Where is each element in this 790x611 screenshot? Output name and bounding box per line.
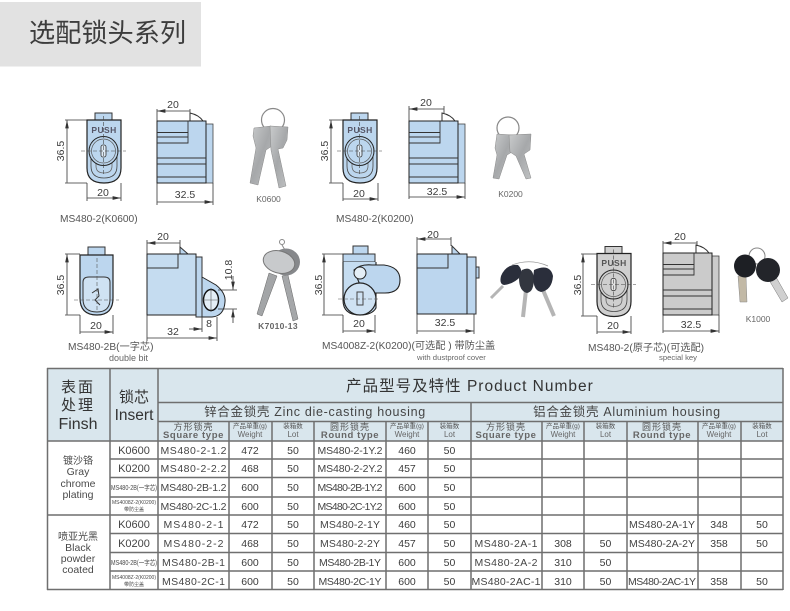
aluminium housing values: 50 [600,557,611,569]
sub-column headings: Round type [633,430,691,441]
product drawing: MS480-2(K0600): MS480-2(K0600) [60,214,138,225]
product drawing: MS480-2(K0200): 20 [353,188,365,200]
finish column heading: Finsh [58,416,98,433]
zinc housing values: 50 [287,482,299,494]
zinc housing values: MS480-2-1Y.2 [318,445,383,457]
zinc housing values: MS480-2B-1 [162,557,225,569]
sub-column headings: Weight [395,430,420,439]
zinc housing values: MS480-2-2Y.2 [318,463,383,475]
sub-column headings: 产品单重(g) [390,421,424,430]
product drawing: MS4008Z-2 with dustproof cover [313,229,554,362]
table header background [47,368,783,441]
insert column values: MS480-2B(一字芯) [111,483,157,492]
product drawing: MS480-2(K0600): K0600 [256,194,281,204]
zinc housing values: 50 [444,482,455,494]
aluminium housing values: 310 [554,576,572,588]
aluminium housing values: 50 [600,576,611,588]
icon: black keys K1000 [734,248,788,302]
sub-column headings: 方形锁壳 [173,421,214,432]
zinc housing values: MS480-2C-1 [162,576,225,588]
sub-column headings: Round type [321,430,379,441]
sub-column headings: 产品单重(g) [233,421,267,430]
icon: keys K7010-13 [257,240,300,321]
sub-column headings: 产品单重(g) [546,421,580,430]
zinc housing values: MS480-2B-1Y.2 [318,482,383,494]
side view with ear [147,231,237,341]
finish: black powder coated: Black [65,542,92,554]
aluminium housing values: 50 [600,538,611,550]
zinc housing values: 50 [444,501,455,513]
aluminium housing values: 348 [710,519,728,531]
zinc housing values: MS480-2-2 [164,538,224,550]
title: 选配锁头系列 [29,18,186,48]
zinc housing values [160,445,455,588]
product drawing: MS480-2(K0200) [319,97,531,225]
sub-column headings: 装箱数 [440,421,460,430]
icon: dark keys [491,262,554,317]
finish: gray chrome plating: chrome [60,478,96,490]
insert column values: K0600 [118,519,150,531]
aluminium housing values: 358 [710,538,728,550]
aluminium housing values: MS480-2A-2Y [629,538,695,550]
product drawing: MS480-2(K0600): 36.5 [55,141,67,161]
finish: black powder coated [58,530,98,576]
zinc housing values: 50 [287,519,299,531]
zinc housing values: 600 [398,557,416,569]
sub-column headings: 装箱数 [283,421,303,430]
dust cover [354,265,400,293]
zinc housing values: 472 [241,445,259,457]
product drawing: MS4008Z-2 with dustproof cover: MS4008Z-2(K0200)(可选配 ) 带防尘盖 [322,339,495,352]
zinc housing values: 600 [241,576,259,588]
housing headings [204,404,721,419]
icon: keys K0200 [493,117,531,179]
side view: 32.5 [427,186,447,198]
product drawing: MS480-2(K0200): MS480-2(K0200) [336,214,414,225]
finish column heading [58,379,98,433]
product drawing: MS480-2B double bit: 20 [90,320,102,332]
sub-column headings: Lot [600,430,612,439]
side view [409,97,465,199]
zinc housing values: 468 [241,463,259,475]
finish column heading: 处理 [61,397,95,414]
zinc housing values: MS480-2C-1Y.2 [318,501,383,513]
zinc housing values: 50 [287,463,299,475]
zinc housing values: 600 [241,557,259,569]
finish column heading: 表面 [61,379,95,396]
aluminium housing values: MS480-2A-2 [474,557,538,569]
zinc housing values: MS480-2B-1Y [319,557,381,569]
zinc housing values: 50 [444,576,455,588]
aluminium housing values: 50 [756,519,768,531]
product drawing: MS480-2B double bit: double bit [109,353,149,363]
zinc housing values: 600 [241,501,259,513]
sub-column headings: Lot [444,430,456,439]
insert column values: K0200 [118,463,150,475]
side view: 20 [674,231,686,243]
zinc housing values: 457 [398,538,416,550]
product drawing: MS4008Z-2 with dustproof cover: 20 [353,318,365,330]
zinc housing values: 460 [398,445,416,457]
housing headings: 锌合金锁壳 Zinc die-casting housing [204,404,426,419]
zinc housing values: 50 [444,463,455,475]
insert column values: MS4008Z-2(K0200) [112,500,156,506]
finish: gray chrome plating: 镀沙铬 [63,454,93,467]
aluminium housing values: MS480-2AC-1 [472,576,541,588]
zinc housing values: 50 [444,557,455,569]
product drawing: MS480-2B double bit: 36.5 [55,275,67,295]
side view with ear: 32 [167,326,179,338]
finish: gray chrome plating: Gray [67,466,90,478]
zinc housing values: 50 [287,576,299,588]
zinc housing values: MS480-2-1Y [320,519,380,531]
icon: keys K0600 [250,108,288,188]
aluminium housing values [472,519,768,588]
insert column values: 带防尘盖 [124,506,144,513]
side view: 20 [167,99,179,111]
insert column values: 带防尘盖 [124,581,144,588]
finish: black powder coated: 喷亚光黑 [58,530,98,543]
side view: 32.5 [681,319,701,331]
zinc housing values: 600 [398,482,416,494]
side view: 20 [420,97,432,109]
zinc housing values: 50 [287,538,299,550]
zinc housing values: 600 [398,501,416,513]
product drawing: MS480-2 special key [572,231,788,362]
zinc housing values: 600 [398,576,416,588]
product drawing: MS480-2 special key: 36.5 [572,275,584,295]
zinc housing values: 50 [287,557,299,569]
product drawing: MS480-2(K0600): 20 [97,187,109,199]
product drawing: MS480-2(K0200): K0200 [498,189,523,199]
title banner [0,2,201,66]
product drawing: MS480-2B double bit: MS480-2B(一字芯) [68,340,153,353]
insert column values: K0600 [118,445,150,457]
product drawing: MS480-2 special key: K1000 [746,314,771,324]
zinc housing values: 472 [241,519,259,531]
zinc housing values: 50 [444,445,455,457]
side view: 32.5 [435,317,455,329]
housing headings: 铝合金锁壳 Aluminium housing [533,404,721,419]
product drawing: MS480-2(K0600) [55,99,288,225]
sub-column headings: 装箱数 [752,421,772,430]
product drawing: MS480-2 special key: MS480-2(原子芯)(可选配) [588,341,704,354]
sub-column headings: Weight [238,430,263,439]
product drawing: MS480-2B double bit: K7010-13 [258,321,298,331]
side view: 20 [427,229,439,241]
finish: gray chrome plating: plating [63,489,94,501]
aluminium housing values: MS480-2AC-1Y [628,576,696,588]
zinc housing values: 50 [287,445,299,457]
aluminium housing values: MS480-2A-1 [474,538,538,550]
aluminium housing values: MS480-2A-1Y [629,519,695,531]
insert column heading [115,389,154,424]
insert column values [111,445,157,588]
zinc housing values: 460 [398,519,416,531]
product drawing: MS480-2(K0200): 36.5 [319,141,331,161]
zinc housing values: 468 [241,538,259,550]
sub-column headings: Weight [707,430,732,439]
insert column heading: 锁芯 [119,389,149,406]
sub-column headings: Lot [287,430,299,439]
side view [417,229,479,334]
insert column values: MS4008Z-2(K0200) [112,575,156,581]
finish: black powder coated: coated [62,564,94,576]
side view: 32.5 [175,189,195,201]
insert column values: K0200 [118,538,150,550]
product drawing: MS4008Z-2 with dustproof cover: 36.5 [313,275,325,295]
sub-column headings: Square type [163,430,224,441]
side view with ear: 8 [206,318,212,330]
aluminium housing values: 50 [756,576,768,588]
zinc housing values: MS480-2-2.2 [160,463,227,475]
side view [663,231,719,333]
zinc housing values: MS480-2-2Y [320,538,380,550]
product drawing: MS480-2 special key: PUSH [601,258,627,268]
sub-column headings: 装箱数 [596,421,616,430]
sub-column headings [163,421,772,441]
product drawing: MS480-2 special key: special key [659,353,697,362]
aluminium housing values: 308 [554,538,572,550]
zinc housing values: MS480-2C-1Y [318,576,382,588]
product number heading: 产品型号及特性 Product Number [346,377,594,395]
sub-column headings: 圆形锁壳 [330,421,370,432]
zinc housing values: 50 [444,538,455,550]
side view with ear: 20 [157,231,169,243]
aluminium housing values: 50 [756,538,768,550]
zinc housing values: MS480-2-1 [164,519,224,531]
product drawing: MS480-2(K0600): PUSH [91,125,117,135]
side view [157,99,213,205]
zinc housing values: 50 [444,519,455,531]
finish: gray chrome plating [60,454,96,501]
zinc housing values: MS480-2C-1.2 [160,501,227,513]
zinc housing values: MS480-2-1.2 [160,445,227,457]
sub-column headings: 产品单重(g) [702,421,736,430]
zinc housing values: 457 [398,463,416,475]
insert column heading: Insert [115,407,154,424]
sub-column headings: 方形锁壳 [486,421,526,432]
zinc housing values: MS480-2B-1.2 [160,482,227,494]
finish: black powder coated: powder [61,553,96,565]
product drawing: MS480-2 special key: 20 [607,320,619,332]
product drawing: MS480-2B double bit [55,231,300,363]
aluminium housing values: 310 [554,557,572,569]
side view with ear: 10.8 [223,260,235,280]
aluminium housing values: 358 [710,576,728,588]
insert column values: MS480-2B(一字芯) [111,558,157,567]
product table [47,368,783,590]
sub-column headings: Square type [476,430,536,441]
sub-column headings: 圆形锁壳 [642,421,682,432]
sub-column headings: Weight [551,430,576,439]
zinc housing values: 600 [241,482,259,494]
product drawing: MS480-2(K0200): PUSH [347,125,373,135]
sub-column headings: Lot [756,430,768,439]
zinc housing values: 50 [287,501,299,513]
product drawing: MS4008Z-2 with dustproof cover: with dustproof cover [416,353,486,362]
